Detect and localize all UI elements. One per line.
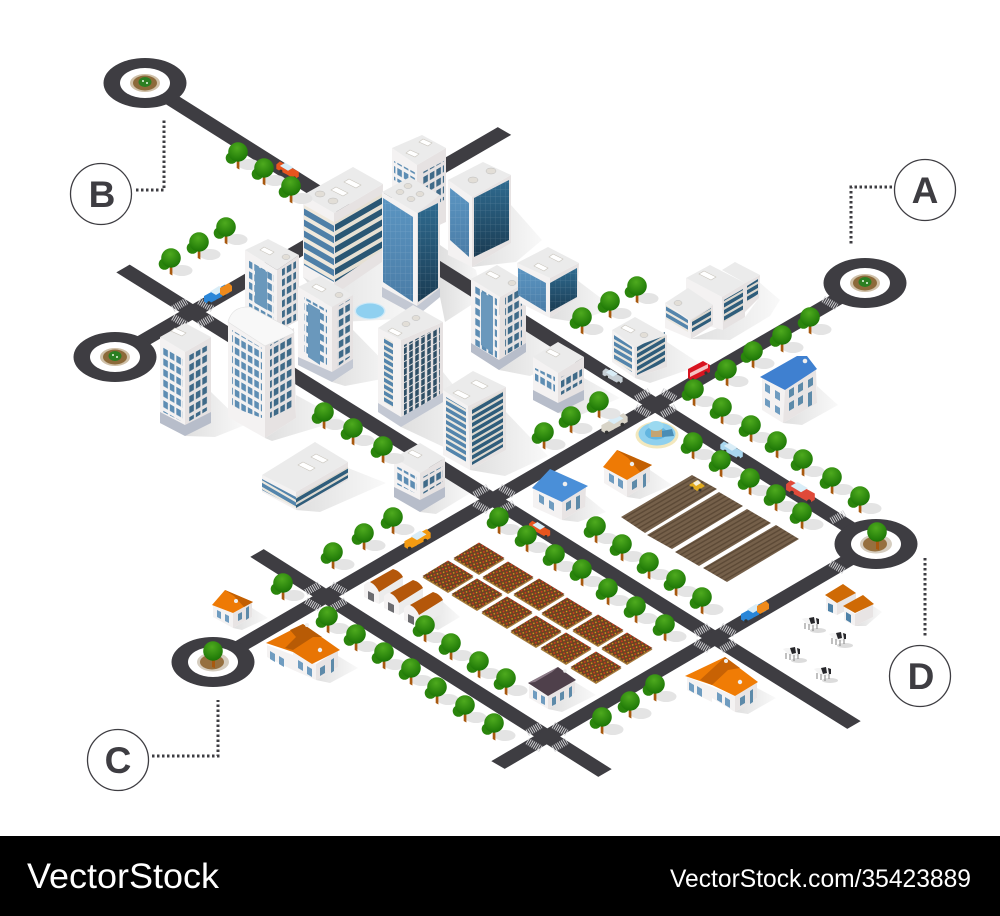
roundabout D — [834, 519, 918, 569]
tree: roundabout D — [867, 522, 887, 550]
tower: arched roof — [228, 307, 296, 438]
tree row: lower road north — [413, 615, 528, 696]
crosswalks — [173, 299, 845, 749]
footer bar: VectorStock.com/35423889 — [670, 865, 971, 893]
field strips — [621, 475, 799, 582]
road network — [108, 79, 883, 777]
label D — [890, 646, 950, 706]
fountain — [636, 421, 678, 448]
barns — [364, 569, 443, 627]
label leader lines — [136, 118, 925, 756]
blue house — [532, 469, 588, 520]
label A — [894, 160, 956, 220]
tower: left of pond upper — [245, 239, 299, 332]
vehicles — [204, 161, 815, 623]
roundabout A — [824, 258, 906, 308]
cows — [783, 617, 853, 683]
tree row: centre road — [312, 402, 404, 464]
tree row: road to C — [271, 507, 414, 601]
label B: B — [89, 174, 115, 215]
striped low block — [612, 317, 667, 378]
tree row: above crop plots — [487, 507, 686, 642]
tree row: upper right — [570, 276, 658, 335]
tree row: lower road south — [316, 606, 516, 741]
roundabout B — [104, 58, 186, 108]
tree row: east of road to D — [710, 397, 882, 514]
low long building — [262, 442, 348, 510]
tower: back small — [392, 135, 446, 235]
harvester — [689, 480, 705, 492]
big orange house right — [685, 657, 758, 712]
tree row: bottom right — [590, 674, 676, 735]
roundabout C — [172, 637, 254, 687]
label B — [70, 164, 132, 224]
ground shadows — [185, 205, 882, 714]
blue house large — [760, 356, 817, 423]
small orange house left — [212, 590, 253, 628]
two small orange houses — [825, 584, 874, 626]
big orange house left — [266, 623, 340, 680]
label C: C — [105, 740, 131, 781]
tree row: upper left — [159, 217, 248, 276]
block near crossroads — [533, 342, 584, 413]
label C — [88, 730, 148, 790]
footer bar: VectorStock — [27, 857, 220, 896]
small block — [394, 443, 445, 512]
label A: A — [912, 170, 938, 211]
tower: left of pond lower — [298, 276, 353, 382]
tree row: road to A — [682, 307, 832, 407]
tree: roundabout C — [203, 641, 223, 668]
low glass office — [517, 247, 579, 318]
tree row: below strip fields — [584, 516, 724, 615]
tree row: top road — [226, 142, 312, 204]
tower: striped front — [443, 371, 506, 470]
roundabout left — [74, 332, 156, 382]
tree row: near crossroads — [532, 391, 620, 450]
tower: striped office — [303, 167, 383, 295]
building cluster — [665, 262, 760, 339]
tower: blue glass — [382, 177, 440, 316]
tower: centre — [378, 305, 443, 427]
tree row: west of road to D — [681, 432, 824, 530]
tower: back glass right — [448, 162, 511, 267]
tower: far left — [160, 323, 211, 436]
orange house — [603, 450, 652, 497]
pond — [354, 302, 386, 320]
footer bar — [0, 836, 1000, 916]
tower: right of centre — [471, 265, 526, 370]
purple house — [528, 667, 576, 709]
label D: D — [908, 656, 934, 697]
crop plots — [422, 542, 652, 684]
